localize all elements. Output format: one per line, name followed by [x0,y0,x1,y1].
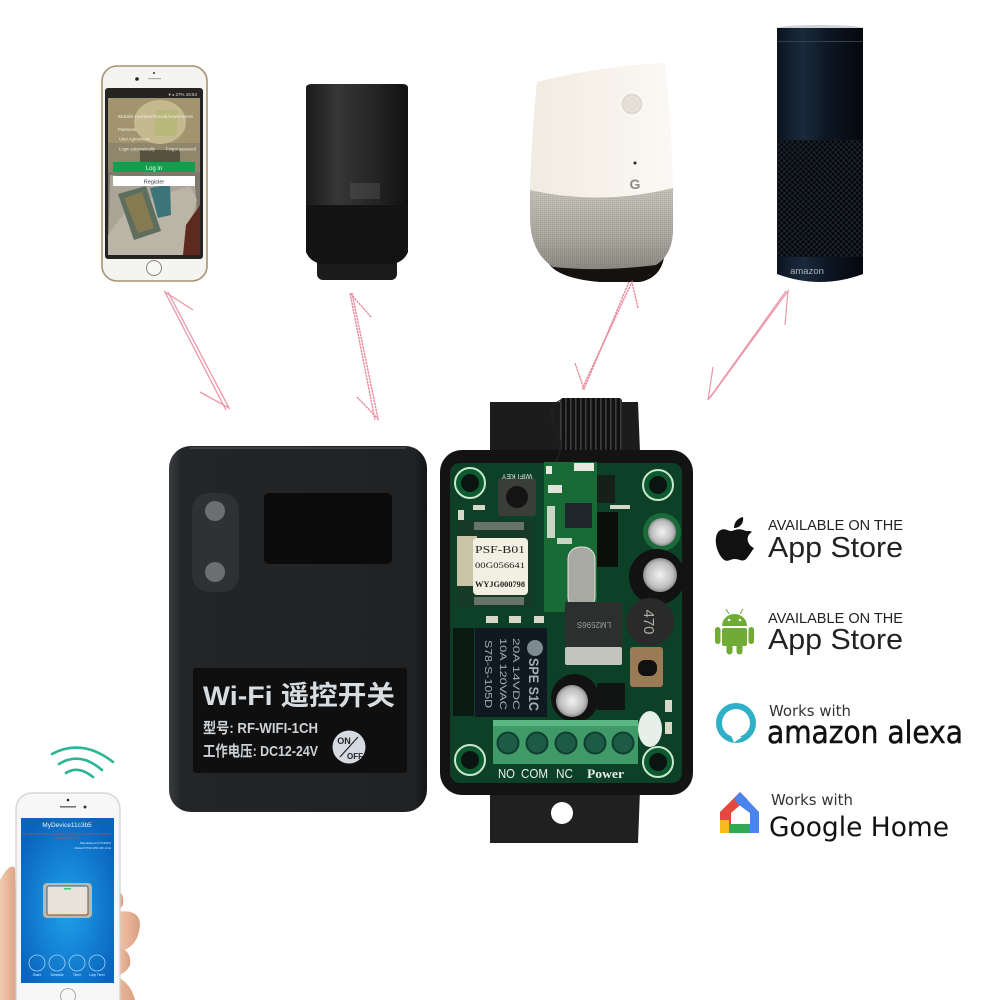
reset button [630,647,663,687]
arrow: Google Home to switch [575,282,638,389]
on/off badge: ON [337,736,351,746]
icon: Apple logo [716,517,754,561]
login form labels [118,114,197,152]
capacitor small [643,513,681,551]
badge: Android App Store: App Store [768,624,903,656]
inductor: 470 [640,609,657,635]
login form labels: Password [118,127,137,132]
arrow: phone to switch [165,292,229,410]
antenna coil [552,398,622,462]
home button [60,988,76,1000]
terminal labels: NC [556,766,573,781]
module label: 00G056641 [475,561,525,570]
smart speaker: Google Home [530,63,673,282]
badge: amazon alexa: amazon alexa [767,715,963,751]
label model: 型号: RF-WIFI-1CH [203,720,318,737]
wifi key button: WIFI KEY [501,472,532,479]
label voltage: 工作电压: DC12-24V [203,743,318,760]
register button: Register [144,180,164,186]
wifi module [457,520,533,607]
mounting holes [455,468,673,777]
app action labels: Schedule [50,973,64,977]
icon: Alexa ring [719,706,753,742]
module label: WYJG000798 [475,580,525,589]
phone: login app [102,66,207,281]
phone home button [146,260,162,276]
module label: PSF-B01 [475,545,525,556]
black transistor [597,683,625,710]
login form labels: Mobile number/Email/Username [118,114,194,119]
login button: Log in [146,166,162,172]
device info: Model:KTNN-WIFI-RF-1CH [74,846,111,850]
badge: App Store: AVAILABLE ON THE [768,518,903,534]
phone: switch app [16,793,120,1000]
inductor [626,598,674,646]
phone status bar: ▾ ⁎ 27% 16:54 [168,92,197,97]
login form labels: Login automatically [119,146,156,152]
enclosure [440,450,693,795]
terminal labels [498,766,624,781]
phone speaker [60,799,86,808]
relay: SPE S1C [526,658,542,711]
login form labels: Forgot password [166,146,197,152]
left edge components [453,628,474,716]
capacitor large [629,549,685,605]
device info [74,841,112,850]
led [638,711,662,747]
relay [475,628,547,717]
relay: S78-S-105D [482,640,494,708]
small surface components [458,505,672,734]
wall switch [43,883,92,918]
badge: Google Home: Works with [771,791,853,809]
small chip top right [597,475,615,503]
top mounting tab [490,402,640,452]
badge: Android App Store: AVAILABLE ON THE [768,611,903,627]
regulator LM2596: LM2596S [577,620,611,629]
phone screen photo [105,88,203,259]
label title: Wi-Fi 遥控开关 [203,681,395,711]
crystal [568,547,595,609]
device info: Manufacturer:KTNNKG [80,841,112,845]
on/off badge: OFF [347,752,363,761]
app action labels: Loop Timer [89,973,106,977]
capacitor lower [551,674,599,722]
antenna window [264,493,392,564]
G logo: G [630,176,641,192]
rf receiver module [544,462,597,612]
microphone dot [634,162,636,164]
badge: App Store: App Store [768,532,903,564]
badge: amazon alexa [767,702,963,751]
hand holding phone [0,866,140,1000]
login button [113,162,195,172]
smart speaker: Amazon Echo [777,25,863,282]
badge: Google Home: Google Home [769,812,949,843]
pcb [450,463,682,783]
app title: MyDevice11c3b5 [42,822,92,829]
badge: Google Home [769,791,949,843]
badge: App Store [768,518,903,564]
app action icons [29,955,105,971]
app action labels [33,973,106,977]
terminal labels: NO [498,766,515,781]
arrow: Echo to switch [708,291,788,400]
app screen [21,818,114,983]
firmware warning: Firmware can be upgraded, please go to device setting to [22,832,112,836]
terminal labels: COM [521,766,548,781]
device: closed black enclosure [169,446,427,812]
product label [193,668,407,773]
touch control [622,94,642,114]
black component [597,512,618,567]
terminal labels: Power [587,766,624,781]
mounting slot [192,493,239,592]
badge: amazon alexa: Works with [769,702,851,720]
regulator LM2596 [565,602,622,665]
module label [475,545,525,589]
badge: Android App Store [768,611,903,656]
firmware warning second line: upgrade it in time [55,836,79,840]
terminal block [493,720,638,764]
login form labels: User Agreement [119,136,150,142]
phone earpiece [135,72,161,81]
register button [113,176,195,186]
amazon wordmark: amazon [790,266,824,277]
app action labels: Timer [73,973,82,977]
relay: 20A 14VDC [510,638,521,710]
bottom mounting tab [490,790,640,843]
wifi key button [498,472,536,516]
icon: Android logo [715,609,754,654]
icon: Google Home [720,792,759,833]
arrow: dark speaker to switch [350,293,378,420]
relay: 10A 120VAC [497,638,508,710]
device: open circuit board [440,398,693,843]
on/off badge [332,730,366,764]
app action labels: Share [33,973,41,977]
smart speaker: dark cylinder [306,84,408,280]
icon: wifi signal [52,748,113,777]
